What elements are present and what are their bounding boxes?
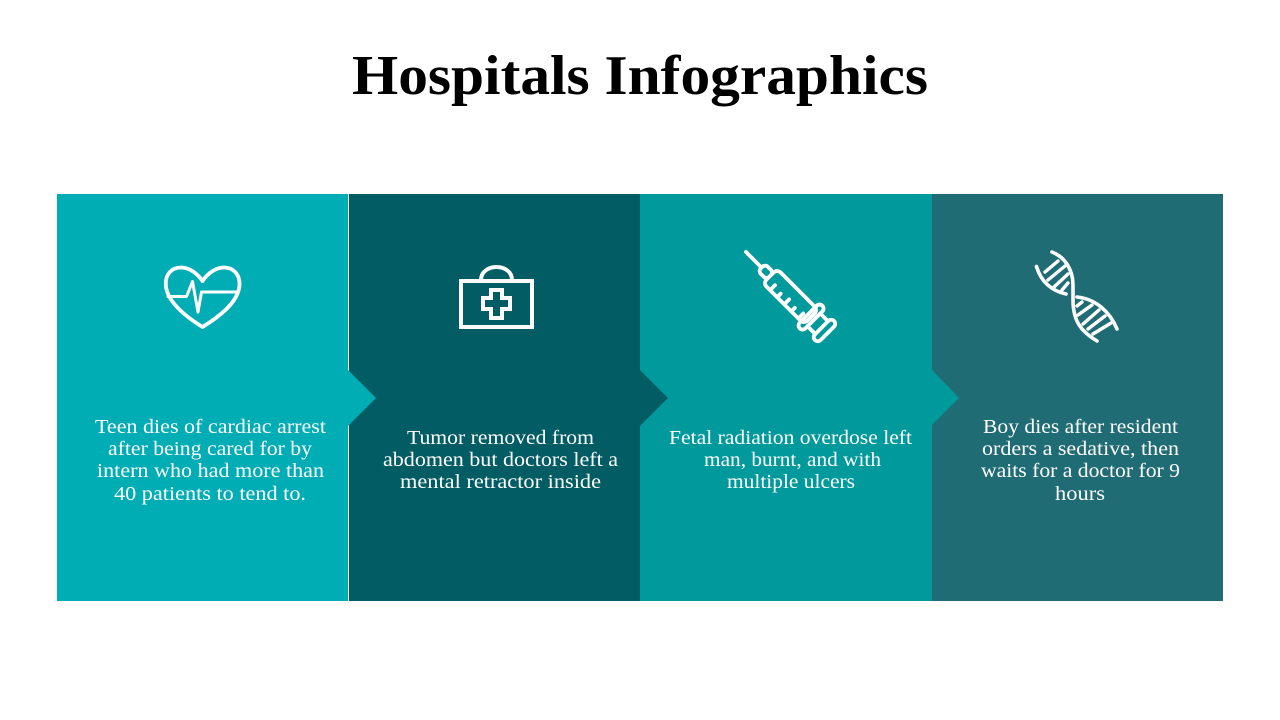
text: sedative: waits for a doctor for 9 <box>981 460 1180 482</box>
icon: heart with pulse <box>166 268 240 327</box>
icon: dna helix <box>1036 252 1117 341</box>
text: cardiac arrest: after being cared for by <box>108 438 313 460</box>
text: tumor: Tumor removed from <box>407 427 594 449</box>
arrow: panel 2 to 3 <box>640 370 668 426</box>
text: radiation: man, burnt, and with <box>704 449 881 471</box>
panel: sedative <box>932 194 1223 601</box>
text: cardiac arrest: 40 patients to tend to. <box>114 483 306 505</box>
text: cardiac arrest: Teen dies of cardiac arrest <box>95 416 326 438</box>
text: sedative: orders a sedative, then <box>982 438 1179 460</box>
text: tumor: mental retractor inside <box>400 471 601 493</box>
text: tumor <box>383 427 618 493</box>
text: radiation: Fetal radiation overdose left <box>669 427 912 449</box>
text: sedative: hours <box>1055 483 1105 505</box>
text: cardiac arrest <box>95 416 326 505</box>
text: cardiac arrest: intern who had more than <box>97 460 324 482</box>
text: sedative <box>981 416 1180 505</box>
text: radiation <box>669 427 912 493</box>
panel: radiation <box>640 194 932 601</box>
icon: syringe <box>735 241 839 345</box>
panel: tumor <box>349 194 640 601</box>
text: tumor: abdomen but doctors left a <box>383 449 618 471</box>
arrow: panel 1 to 2 <box>348 370 376 426</box>
arrow: panel 3 to 4 <box>932 370 959 425</box>
title: Hospitals Infographics <box>352 45 928 107</box>
text: sedative: Boy dies after resident <box>983 416 1178 438</box>
icon: medical kit <box>461 267 532 327</box>
text: radiation: multiple ulcers <box>727 471 855 493</box>
panel: cardiac arrest <box>57 194 348 601</box>
